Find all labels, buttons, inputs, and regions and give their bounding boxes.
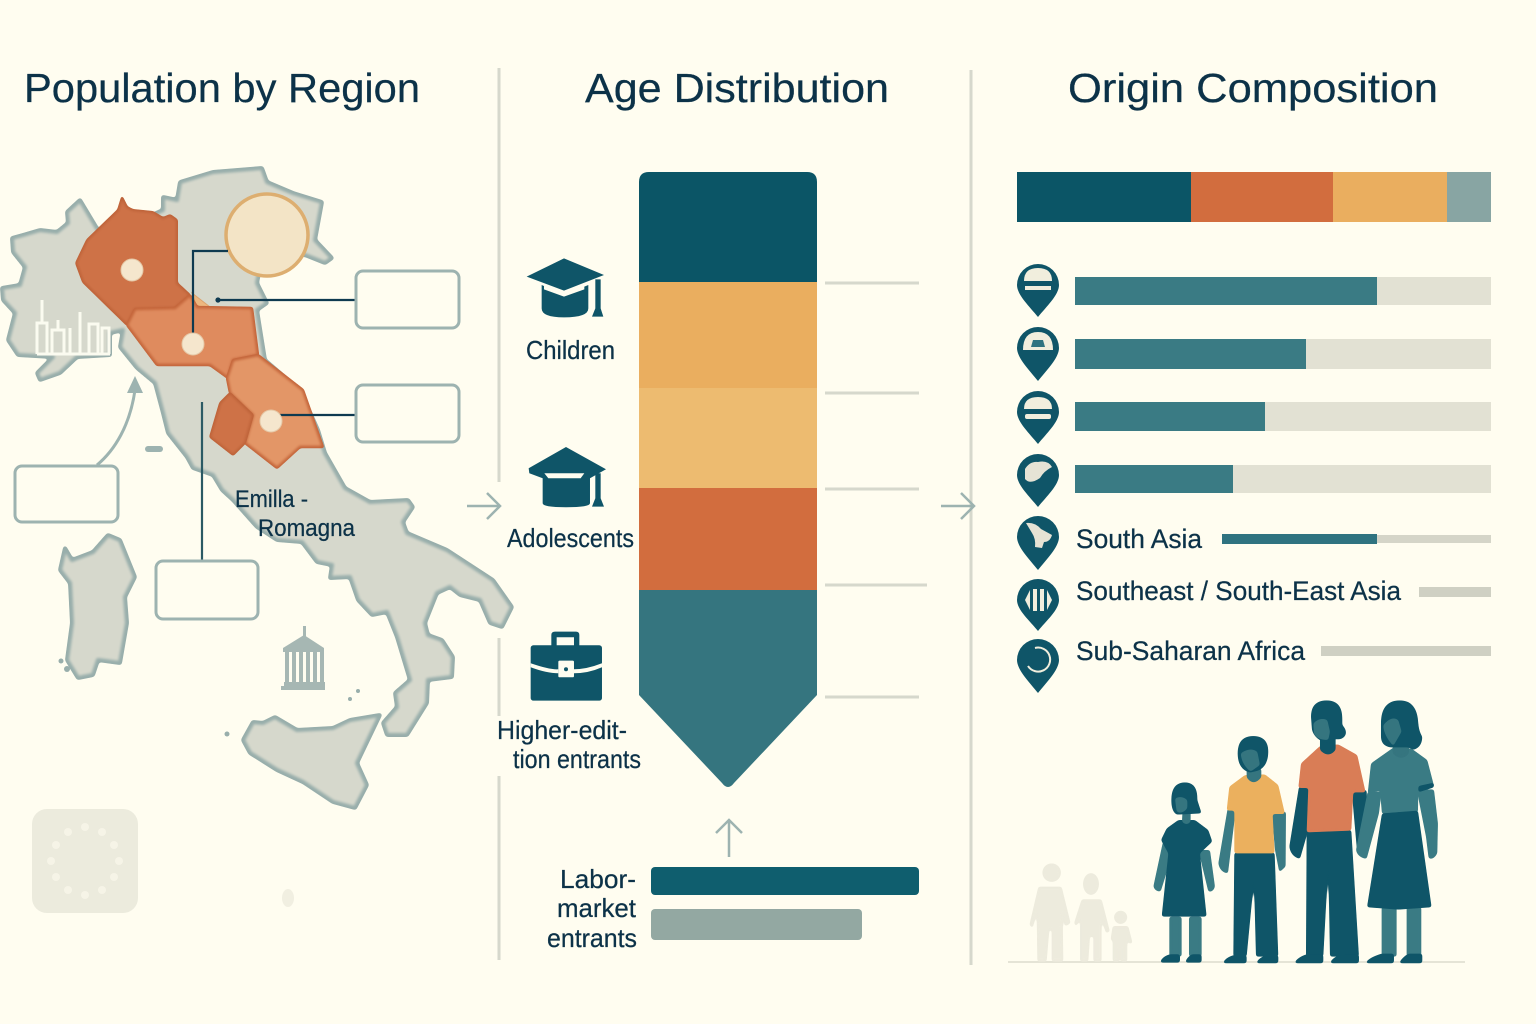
label: Adolescents: Adolescents xyxy=(507,523,634,553)
leader lines xyxy=(193,251,356,561)
callout circle xyxy=(226,194,308,276)
illustration: boy xyxy=(1218,736,1286,963)
label: Labor-market entrants: Labor- xyxy=(560,864,636,894)
icon: pin 2 xyxy=(1017,327,1059,381)
icon: pin 7 xyxy=(1017,639,1059,693)
heading: Population by Region: Population by Region xyxy=(24,65,420,111)
bars: labor-market entrants xyxy=(651,867,919,940)
label: Labor-market entrants: entrants xyxy=(547,923,637,953)
bar: origin row 4 xyxy=(1075,465,1491,493)
label: Children: Children xyxy=(526,335,615,365)
label: Higher-education entrants: Higher-edit- xyxy=(497,715,627,745)
bar: South Asia xyxy=(1222,534,1491,544)
icon: pin 5 xyxy=(1017,516,1059,570)
icon: EU flag square xyxy=(32,809,138,913)
illustration: girl xyxy=(1153,782,1215,963)
map: small tan region xyxy=(192,293,210,307)
bar: origin row 2 xyxy=(1075,339,1491,369)
icon: pin 1 xyxy=(1017,264,1059,317)
map: south-east highlighted region xyxy=(227,355,323,468)
icon: graduation cap, children xyxy=(527,258,604,317)
label: Labor-market entrants xyxy=(547,864,637,953)
map label: Emilia-Romagna xyxy=(235,486,356,542)
label: South Asia: South Asia xyxy=(1076,524,1203,554)
panel: origin composition xyxy=(1008,172,1491,963)
bar: origin row 3 xyxy=(1075,402,1491,431)
arrow: age to origin xyxy=(941,493,974,519)
empty label box: upper right xyxy=(356,271,459,328)
heading: Origin Composition: Origin Composition xyxy=(1068,65,1438,111)
map label: Emilia-Romagna: Emilla - xyxy=(235,486,308,513)
arrow: curved to the north xyxy=(97,376,143,465)
icon: pin 3 xyxy=(1017,391,1059,444)
label: Higher-education entrants: tion entrants xyxy=(513,744,641,774)
icon: briefcase xyxy=(531,632,602,701)
illustration: woman xyxy=(1356,700,1438,963)
icon: pin 4 xyxy=(1017,454,1059,507)
map: north-west highlighted region xyxy=(76,197,190,325)
label: Higher-education entrants xyxy=(497,715,641,774)
map: Sardinia xyxy=(60,535,135,678)
chart: stacked origin bar xyxy=(1017,172,1491,222)
label: Labor-market entrants: market xyxy=(557,893,637,923)
arrow: upward xyxy=(716,820,742,857)
map label: Emilia-Romagna: Romagna xyxy=(258,515,356,542)
icon: graduation cap, adolescents xyxy=(529,447,606,507)
icon: pin 6 xyxy=(1017,579,1059,631)
label: Sub-Saharan Africa: Sub-Saharan Africa xyxy=(1076,636,1306,666)
map: dark sub-region xyxy=(210,393,253,455)
empty label box: middle right xyxy=(356,385,459,442)
map: central highlighted region xyxy=(127,295,258,378)
chart: stacked age column xyxy=(639,172,817,787)
heading: Age Distribution: Age Distribution xyxy=(585,65,889,111)
bar: Southeast Asia xyxy=(1419,587,1491,597)
map: Sicily xyxy=(243,715,380,808)
bar: Sub-Saharan Africa xyxy=(1321,646,1491,656)
bar: origin row 1 xyxy=(1075,277,1491,305)
decorative ground line xyxy=(1008,961,1465,963)
icon: classical temple xyxy=(281,626,325,690)
empty value ticks xyxy=(825,283,927,697)
panel: Italy map xyxy=(2,168,512,913)
empty label box: lower centre xyxy=(156,561,258,619)
arrow: map to age xyxy=(467,493,500,519)
region markers xyxy=(121,259,282,432)
illustration: man xyxy=(1289,700,1368,963)
icon: city skyline xyxy=(37,300,110,354)
empty label box: left xyxy=(15,466,118,522)
map: Italian mainland xyxy=(2,168,512,735)
panel: age distribution xyxy=(497,172,927,953)
label: Southeast Asia: Southeast / South-East Asia xyxy=(1076,576,1402,606)
illustration: faded family xyxy=(1029,863,1133,962)
